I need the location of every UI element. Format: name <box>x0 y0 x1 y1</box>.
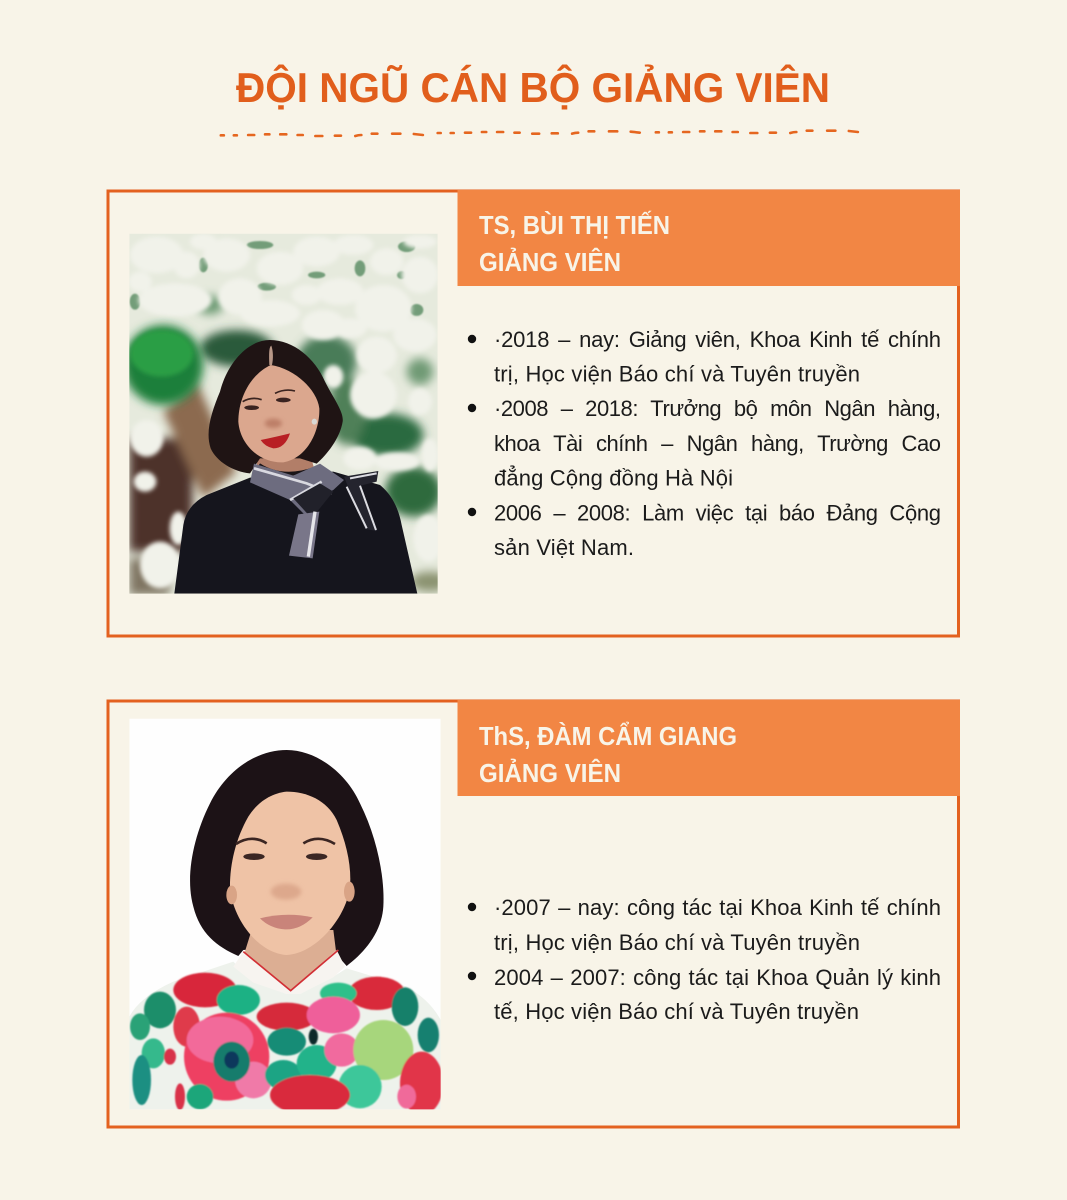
photo: ID portrait with floral dress <box>129 719 443 1115</box>
neck <box>243 930 337 993</box>
career history list: ·2008 – 2018: Trưởng bộ môn Ngân hàng, <box>494 396 941 421</box>
photo: portrait in front of white blossoms <box>123 234 450 595</box>
hair <box>190 750 384 966</box>
career history list: trị, Học viện Báo chí và Tuyên truyền <box>494 930 860 955</box>
panel: lecturer Đàm Cẩm Giang <box>108 700 960 1127</box>
scarf <box>250 464 344 518</box>
body <box>174 472 417 594</box>
title: ĐỘI NGŨ CÁN BỘ GIẢNG VIÊN <box>236 63 830 111</box>
career history list: 2006 – 2008: Làm việc tại báo Đảng Cộng <box>494 500 941 526</box>
collar <box>233 950 345 994</box>
career history list: đẳng Cộng đồng Hà Nội <box>494 466 733 490</box>
name header <box>458 700 960 796</box>
face <box>230 792 350 955</box>
name header: ThS, ĐÀM CẨM GIANG <box>479 721 737 751</box>
name header: GIẢNG VIÊN <box>479 758 621 788</box>
neck <box>256 458 314 476</box>
name header <box>458 190 960 286</box>
career history list: trị, Học viện Báo chí và Tuyên truyền <box>494 362 860 386</box>
dress <box>129 962 441 1109</box>
infographic canvas <box>106 64 960 1128</box>
career history list: ·2018 – nay: Giảng viên, Khoa Kinh tế chính <box>494 327 941 352</box>
career history list: khoa Tài chính – Ngân hàng, Trường Cao <box>494 431 941 456</box>
hair <box>209 340 343 473</box>
career history list: tế, Học viện Báo chí và Tuyên truyền <box>494 999 859 1024</box>
career history list: sản Việt Nam. <box>494 535 634 560</box>
career history list <box>468 327 941 560</box>
face <box>238 365 319 462</box>
career history list <box>468 895 941 1024</box>
name header: GIẢNG VIÊN <box>479 247 621 277</box>
panel: lecturer Bùi Thị Tiến <box>108 190 960 636</box>
name header: TS, BÙI THỊ TIẾN <box>479 210 670 240</box>
career history list: ·2007 – nay: công tác tại Khoa Kinh tế chính <box>494 895 941 920</box>
hand-drawn dashed underline <box>221 131 858 136</box>
career history list: 2004 – 2007: công tác tại Khoa Quản lý kinh <box>494 965 941 990</box>
